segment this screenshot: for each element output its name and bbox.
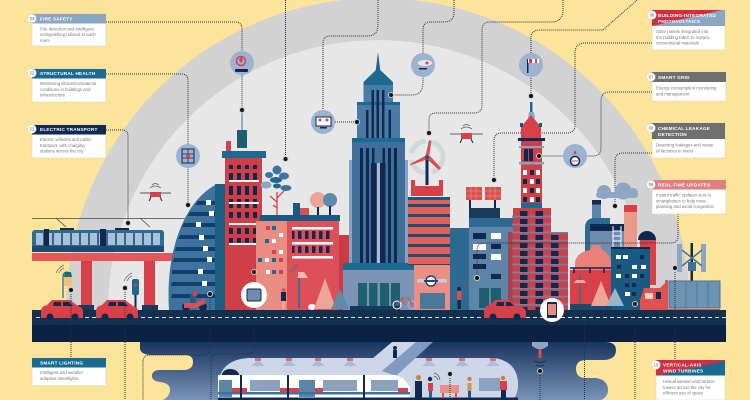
right tower [508,102,568,310]
panel: chemical leakage detection: CHEMICAL LEAKAGE [658,126,710,131]
panel: smart grid: and management [656,91,690,96]
cars [41,300,526,320]
panel: smart lighting: SMART LIGHTING [40,360,83,366]
ceiling lamps [251,358,500,366]
panel: smart grid: 07 [649,75,654,80]
panel: vertical-axis wind turbines: VERTICAL-AXIS [663,362,702,368]
person right [500,376,507,398]
panel: electric transport: stations across the city [40,148,84,154]
platform hall [218,358,518,400]
pedestrian with dog [281,288,316,310]
panel: structural health: 22 [30,71,35,76]
panel: smart lighting: Intelligent and weather [40,370,84,375]
panel: smart lighting [32,358,106,386]
truck [640,280,720,320]
mid-rise building [256,215,349,310]
panel: fire safety: Fire detection and intelligent [40,26,95,32]
panel: structural health: conditions in buildings and [40,87,91,92]
panel: real-time updates: smartphones to help route- [656,198,708,203]
motorbike [182,292,207,311]
vertical axis wind turbine [677,243,706,281]
red tower [222,108,266,310]
viaduct [32,253,174,310]
panel: electric transport [28,125,106,158]
icon: water quality [563,144,587,168]
panel: building-integrated photovoltaics: the building fabric to replace [656,35,710,40]
platform floor [218,398,518,400]
metro station [218,342,518,400]
icon: video monitor [311,110,335,134]
network nodes [68,92,678,376]
panel: chemical leakage detection: Detecting leakages and waste [656,142,714,148]
panel: structural health: infrastructure [40,92,66,98]
panel: fire safety: extinguishing tailored to each [40,32,96,37]
panel: real-time updates: planning and avoid congestion [656,204,715,209]
escalator [372,342,422,360]
traffic signal [124,273,139,309]
panel: building-integrated photovoltaics: 06 [650,13,655,18]
panel: electric transport: transport, with charging [40,143,85,148]
panel: real-time updates: 09 [649,182,654,187]
panel: smart grid: Energy consumption monitoring [656,86,717,90]
panel: real-time updates [647,180,726,214]
rooftop garden [260,166,337,215]
connector lines [106,0,652,223]
underground blob [140,342,616,400]
info board [479,378,500,391]
clouds [596,182,638,200]
icon: road sensor [241,282,267,308]
panel: structural health: Monitoring vibrations/material [40,81,96,86]
striped building [408,180,450,310]
panel: fire safety: 23 [30,16,35,21]
panel: real-time updates: REAL-TIME UPDATES [658,182,710,188]
bicycle [393,298,416,309]
panel: vertical-axis wind turbines: WIND TURBINES [663,368,703,374]
panel: smart grid: SMART GRID [658,75,690,80]
sensor beacon [532,342,548,366]
factory [570,200,656,310]
car 2 [96,300,138,320]
icon: fire safety [230,51,254,75]
lower dotted lines [71,214,678,400]
wind turbine on building [410,140,443,185]
blue building [450,208,513,310]
passengers [393,346,472,398]
street lamp left [56,265,72,298]
panel: building-integrated photovoltaics: PHOTOVOLTAICS [658,19,700,24]
car 3 [484,300,526,320]
panel: chemical leakage detection [647,123,725,158]
panel: chemical leakage detection: 08 [649,126,654,131]
street lamp centre [290,264,308,308]
station wifi lines [434,371,540,400]
solar panels [466,187,501,208]
bench [440,385,459,398]
panel: fire safety: FIRE SAFETY [40,16,73,22]
panel: structural health: STRUCTURAL HEALTH [40,71,96,76]
icon: security camera [411,53,435,77]
skyscraper [343,52,414,310]
person with phone [457,281,468,309]
panel: electric transport: Electric vehicles and public [40,137,92,142]
grey arch backdrop [66,0,690,310]
panel: vertical-axis wind turbines: towers across the city for [663,385,711,390]
panel: chemical leakage detection: of factories in rivers [656,148,693,153]
sail tower [168,184,225,310]
icon: structural health [176,144,200,168]
metro train [218,369,410,399]
overhead wire [32,218,185,227]
car 1 [41,300,83,320]
tents [314,278,349,309]
panel: electric transport: 21 [30,127,35,132]
panel: structural health [28,69,106,102]
panel: smart lighting: adaptive streetlights [40,376,78,381]
panel: vertical-axis wind turbines: efficient use of space [663,390,704,396]
panel: building-integrated photovoltaics [648,10,725,50]
panel: building-integrated photovoltaics: conventional materials [656,40,699,46]
panel: vertical-axis wind turbines: Helical twisted wind turbine [663,379,715,384]
drone left [140,184,171,201]
elevated rail [32,218,185,310]
panel: building-integrated photovoltaics: Solar panels integrated into [656,29,709,34]
panel: chemical leakage detection: DETECTION [658,132,687,137]
road [32,310,726,342]
panel: electric transport: ELECTRIC TRANSPORT [40,127,98,132]
panel: vertical-axis wind turbines: 10 [654,363,659,368]
drone right [450,124,483,143]
panel: vertical-axis wind turbines [652,360,725,400]
panel: smart grid [647,72,726,101]
panel: fire safety [28,14,106,46]
icon: smartphone [540,298,564,322]
panel: building-integrated photovoltaics: BUILDING-INTEGRATED [658,13,717,18]
icon: wind sock [519,53,543,77]
train [32,228,164,252]
panel: real-time updates: Instant traffic updates sent to [656,192,712,198]
tube station [417,276,447,309]
panel: fire safety: room [40,38,50,43]
